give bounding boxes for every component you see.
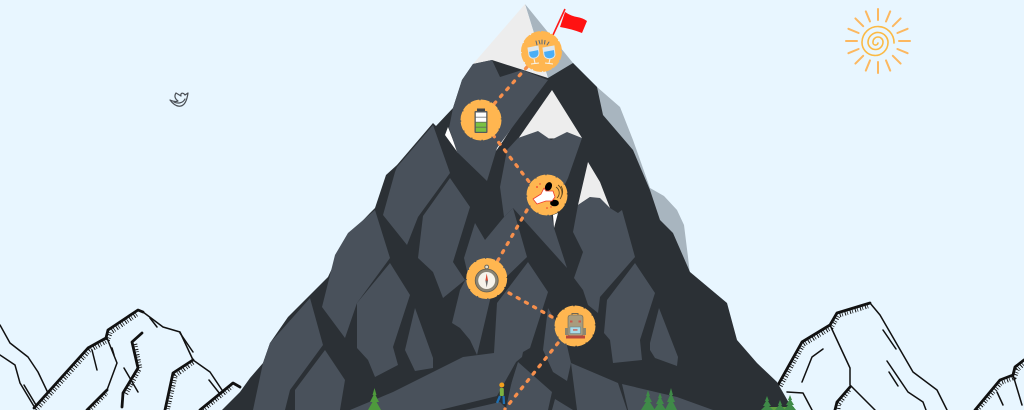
- second snow cap: [518, 90, 582, 139]
- tree cluster: right foot: [761, 395, 796, 410]
- mountain shadow side: [525, 4, 690, 275]
- dark ledge: [440, 362, 516, 410]
- milestone: celebration glasses: [522, 32, 561, 71]
- icon: bird: [170, 93, 188, 106]
- rock faces: [253, 60, 713, 410]
- mountain body: [222, 60, 793, 410]
- milestone: backpack: [555, 306, 595, 346]
- dashed climbing route: [493, 67, 558, 409]
- left foreground mountains: [0, 310, 240, 410]
- milestone: compass: [467, 259, 507, 298]
- icon: red summit flag: [553, 9, 587, 35]
- milestone: battery: [461, 100, 501, 140]
- tree cluster: centre right: [641, 388, 677, 410]
- third snow cap: [578, 162, 610, 208]
- right foreground mountains: [778, 303, 1024, 410]
- milestone: hand and footprints: [527, 175, 567, 215]
- icon: hiker: [497, 382, 504, 404]
- snow slivers: [445, 118, 558, 228]
- icon: sun: [846, 9, 910, 73]
- tree: [368, 388, 381, 410]
- summit snow: [473, 4, 548, 80]
- main mountain: [222, 4, 793, 410]
